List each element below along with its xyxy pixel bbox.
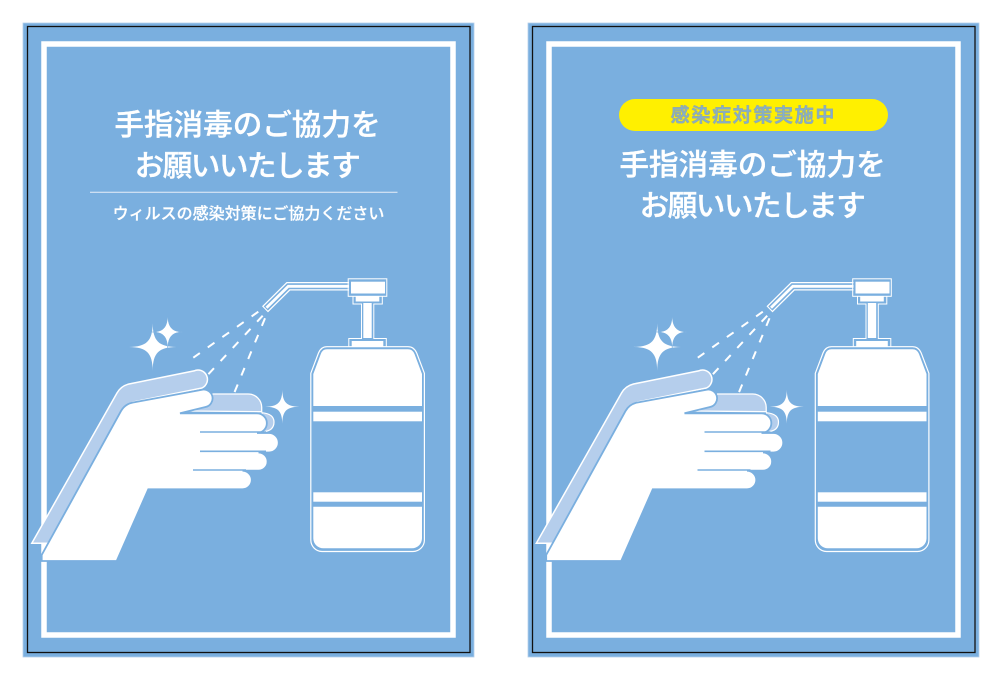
icon: crescent fingertip	[262, 413, 274, 432]
heading: お願いいたします	[640, 190, 864, 223]
poster: left	[23, 23, 474, 657]
icon: hand	[42, 390, 279, 561]
icon: sparkles	[634, 314, 804, 424]
pump nozzle	[770, 286, 854, 309]
illustration: hand and sanitizer	[32, 279, 424, 561]
poster background	[23, 23, 474, 657]
subheading: ウィルスの感染対策にご協力ください	[113, 205, 384, 223]
illustration: hand and sanitizer	[536, 279, 929, 561]
icon: back finger	[536, 370, 712, 543]
spray dashes	[698, 312, 770, 393]
spray dashes	[193, 312, 265, 393]
white inner frame	[44, 44, 453, 635]
heading	[114, 109, 381, 183]
white inner frame	[549, 44, 958, 635]
black frame line	[28, 26, 470, 652]
poster: right	[528, 23, 979, 657]
icon: crescent fingertip	[766, 413, 778, 432]
heading	[619, 149, 886, 223]
pump head and stem	[853, 279, 891, 348]
poster background	[528, 23, 979, 657]
sanitizer bottle	[311, 347, 424, 552]
yellow badge	[619, 99, 888, 131]
sanitizer bottle	[815, 347, 929, 552]
icon: rear finger	[694, 394, 766, 412]
heading: お願いいたします	[135, 150, 359, 183]
icon: hand	[546, 390, 783, 561]
heading: 手指消毒のご協力を	[619, 149, 886, 182]
icon: sparkles	[129, 314, 299, 424]
yellow badge: 感染症対策実施中	[671, 104, 836, 126]
icon: back finger	[32, 370, 207, 543]
pump head and stem	[348, 279, 387, 348]
pump nozzle	[265, 286, 349, 309]
icon: rear finger	[190, 394, 262, 412]
heading: 手指消毒のご協力を	[114, 109, 381, 142]
black frame line	[532, 26, 975, 652]
